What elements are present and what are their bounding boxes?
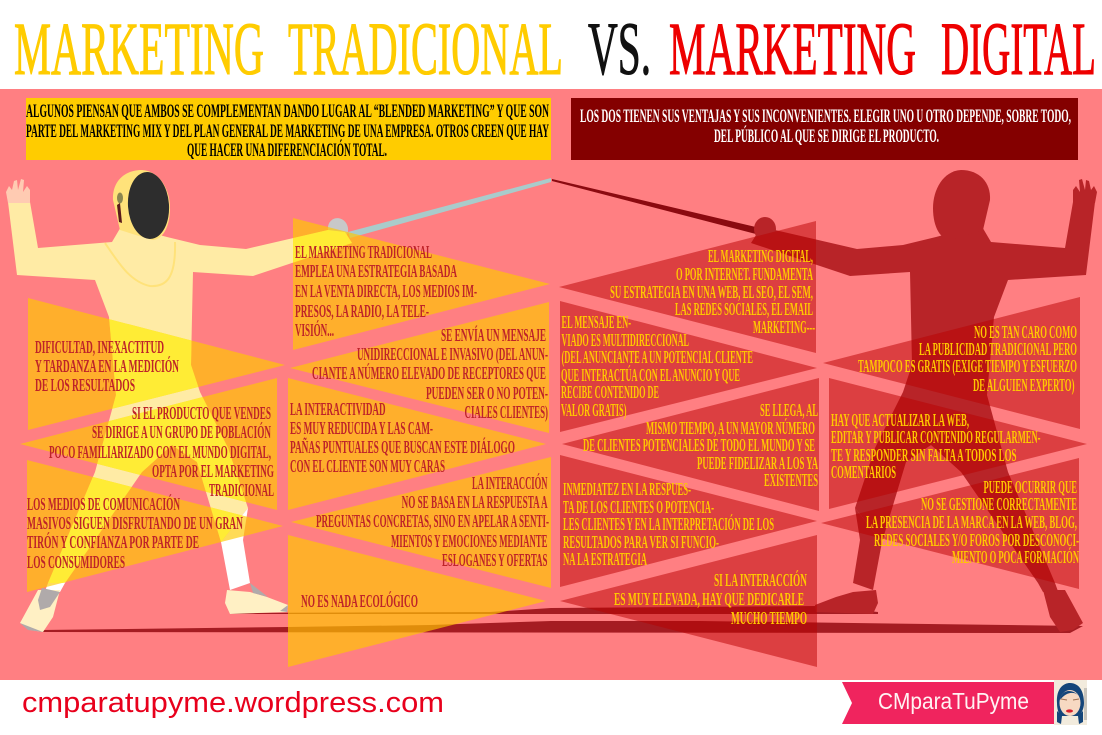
text: interacción xyxy=(316,472,549,570)
title xyxy=(14,8,1096,91)
text: marketing tradicional estrategia xyxy=(295,242,477,340)
text: (DEL ANUNCIANTE A UN POTENCIAL CLIENTE xyxy=(562,347,753,368)
text: marketing tradicional estrategia: VISIÓN... xyxy=(295,319,334,340)
text: si el producto: SI EL PRODUCTO QUE VENDES xyxy=(132,403,271,423)
text: interactividad: LA INTERACTIVIDAD xyxy=(290,399,386,419)
figure: bright legs seen through triangles xyxy=(48,230,352,583)
text: QUE INTERACTÚA CON EL ANUNCIO Y QUE xyxy=(561,364,740,385)
text: medios masivos xyxy=(27,493,243,572)
text: medios masivos: TIRÓN Y CONFIANZA POR PARTE DE xyxy=(27,531,199,552)
panel: red triangles xyxy=(559,221,1087,667)
footer: ribbon: CMparaTuPyme xyxy=(878,688,1029,714)
title: MARKETING xyxy=(14,8,264,91)
text: inmediatez: TA DE LOS CLIENTES O POTENCIA- xyxy=(563,497,714,517)
text: mensaje unidireccional: SE ENVÍA UN MENSAJE xyxy=(441,324,546,345)
text: MISMO TIEMPO, A UN MAYOR NÚMERO xyxy=(646,417,815,438)
text: EXISTENTES xyxy=(764,470,818,490)
text: interacción: ESLOGANES Y OFERTAS xyxy=(442,550,548,570)
text: PARTE DEL MARKETING MIX Y DEL PLAN GENERAL DE MARKETING DE UNA EMPRESA. OTROS CREEN QUE HAY xyxy=(26,121,549,142)
text: LA INTERACCIÓN xyxy=(472,472,548,493)
footer: website url: cmparatupyme.wordpress.com xyxy=(22,687,444,719)
text: MARKETING--- xyxy=(753,317,815,337)
text: si la interacción xyxy=(614,569,807,628)
text: mensaje multidireccional: EL MENSAJE EN- xyxy=(562,312,631,332)
text: mensaje multidireccional xyxy=(561,312,753,421)
text: interactividad: CON EL CLIENTE SON MUY CARAS xyxy=(290,456,445,476)
callout: yellow intro box: ALGUNOS PIENSAN QUE AMBOS SE COMPLEMENTAN DANDO LUGAR AL “BLENDED MARKETING” Y QUE SON xyxy=(26,101,549,122)
text: si el producto: SE DIRIGE A UN GRUPO DE POBLACIÓN xyxy=(92,421,271,442)
text: interactividad: ES MUY REDUCIDA Y LAS CAM- xyxy=(290,418,433,438)
text: mensaje multidireccional: VALOR GRATIS) xyxy=(561,400,626,421)
text: LAS REDES SOCIALES, EL EMAIL xyxy=(675,299,813,319)
text: no es tan caro xyxy=(858,322,1077,396)
text: SE LLEGA, AL xyxy=(760,400,818,420)
callout: yellow intro box: QUE HACER UNA DIFERENCIACIÓN TOTAL. xyxy=(187,139,387,161)
text: EL MARKETING DIGITAL, xyxy=(708,246,813,266)
sword: silver left blade xyxy=(348,178,551,238)
text: mensaje multidireccional: VIADO ES MULTIDIRECCIONAL xyxy=(562,330,689,350)
text: interactividad: PAÑAS PUNTUALES QUE BUSCAN ESTE DIÁLOGO xyxy=(290,436,515,457)
text: mensaje multidireccional: RECIBE CONTENIDO DE xyxy=(561,382,659,402)
text: si el producto xyxy=(49,403,274,500)
text: si la interacción: ES MUY ELEVADA, HAY QUE DEDICARLE xyxy=(614,589,804,609)
text: medios masivos: MASIVOS SIGUEN DISFRUTANDO DE UN GRAN xyxy=(27,513,243,533)
text: actualizar la web xyxy=(831,410,1040,482)
callout: yellow intro box xyxy=(26,98,551,161)
text: marketing tradicional estrategia: EMPLEA UNA ESTRATEGIA BASADA xyxy=(295,261,457,281)
text: marketing digital estrategia xyxy=(610,246,815,337)
text: mensaje unidireccional: PUEDEN SER O NO POTEN- xyxy=(426,383,548,403)
text: puede ocurrir xyxy=(866,477,1079,567)
text: medios masivos: LOS CONSUMIDORES xyxy=(27,552,125,572)
text: se llega xyxy=(583,400,818,490)
text: marketing tradicional estrategia: PRESOS, LA RADIO, LA TELE- xyxy=(295,301,429,321)
sword: dark right blade xyxy=(552,179,764,236)
text: mensaje unidireccional xyxy=(312,324,548,423)
figure: dark fencer silhouette xyxy=(751,170,1097,632)
text: interactividad xyxy=(290,399,515,476)
text: medios masivos: LOS MEDIOS DE COMUNICACIÓN xyxy=(27,493,180,514)
floor shadows xyxy=(42,606,1083,633)
footer: ribbon xyxy=(842,682,1054,724)
text: O POR INTERNET. FUNDAMENTA xyxy=(676,264,813,284)
text: dificultad xyxy=(35,337,179,395)
figure: yellow fencer xyxy=(6,170,352,632)
text: inmediatez: NA LA ESTRATEGIA xyxy=(563,549,647,569)
text: si el producto: POCO FAMILIARIZADO CON EL MUNDO DIGITAL, xyxy=(49,442,271,462)
text: dificultad: DIFICULTAD, INEXACTITUD xyxy=(35,337,164,357)
text: si el producto: OPTA POR EL MARKETING xyxy=(152,461,274,481)
text: no ecológico: NO ES NADA ECOLÓGICO xyxy=(301,590,418,611)
text: DE CLIENTES POTENCIALES DE TODO EL MUNDO Y SE xyxy=(583,435,815,455)
text: mensaje unidireccional: CIANTE A NÚMERO ELEVADO DE RECEPTORES QUE xyxy=(312,362,546,383)
text: marketing tradicional estrategia: EL MARKETING TRADICIONAL xyxy=(295,242,432,262)
panel: orange triangles xyxy=(20,218,551,667)
text: mensaje unidireccional: UNIDIRECCIONAL E INVASIVO (DEL ANUN- xyxy=(357,344,548,365)
text: inmediatez xyxy=(563,479,774,569)
icon: avatar xyxy=(1054,680,1087,725)
text: marketing tradicional estrategia: EN LA VENTA DIRECTA, LOS MEDIOS IM- xyxy=(295,281,477,301)
text: inmediatez: INMEDIATEZ EN LA RESPUES- xyxy=(563,479,691,499)
callout: dark red intro box xyxy=(571,98,1078,160)
text: actualizar la web: COMENTARIOS xyxy=(831,462,896,482)
text: LES CLIENTES Y EN LA INTERPRETACIÓN DE LOS xyxy=(563,513,774,534)
text: dificultad: DE LOS RESULTADOS xyxy=(35,375,135,395)
title: TRADICIONAL xyxy=(288,8,563,91)
text: interacción: PREGUNTAS CONCRETAS, SINO EN APELAR A SENTI- xyxy=(316,511,549,531)
text: CIALES CLIENTES) xyxy=(464,402,548,423)
text: PUEDE FIDELIZAR A LOS YA xyxy=(697,453,818,473)
text: MIENTOS Y EMOCIONES MEDIANTE xyxy=(391,531,548,551)
text: inmediatez: RESULTADOS PARA VER SI FUNCIO- xyxy=(563,532,719,552)
title: VS. xyxy=(588,8,651,91)
text: interacción: NO SE BASA EN LA RESPUESTA A xyxy=(402,492,548,512)
text: si la interacción: SI LA INTERACCIÓN xyxy=(714,569,807,590)
text: TRADICIONAL xyxy=(209,480,274,500)
text: dificultad: Y TARDANZA EN LA MEDICIÓN xyxy=(35,355,179,376)
text: si la interacción: MUCHO TIEMPO xyxy=(731,608,807,628)
text: SU ESTRATEGIA EN UNA WEB, EL SEO, EL SEM, xyxy=(610,282,813,302)
